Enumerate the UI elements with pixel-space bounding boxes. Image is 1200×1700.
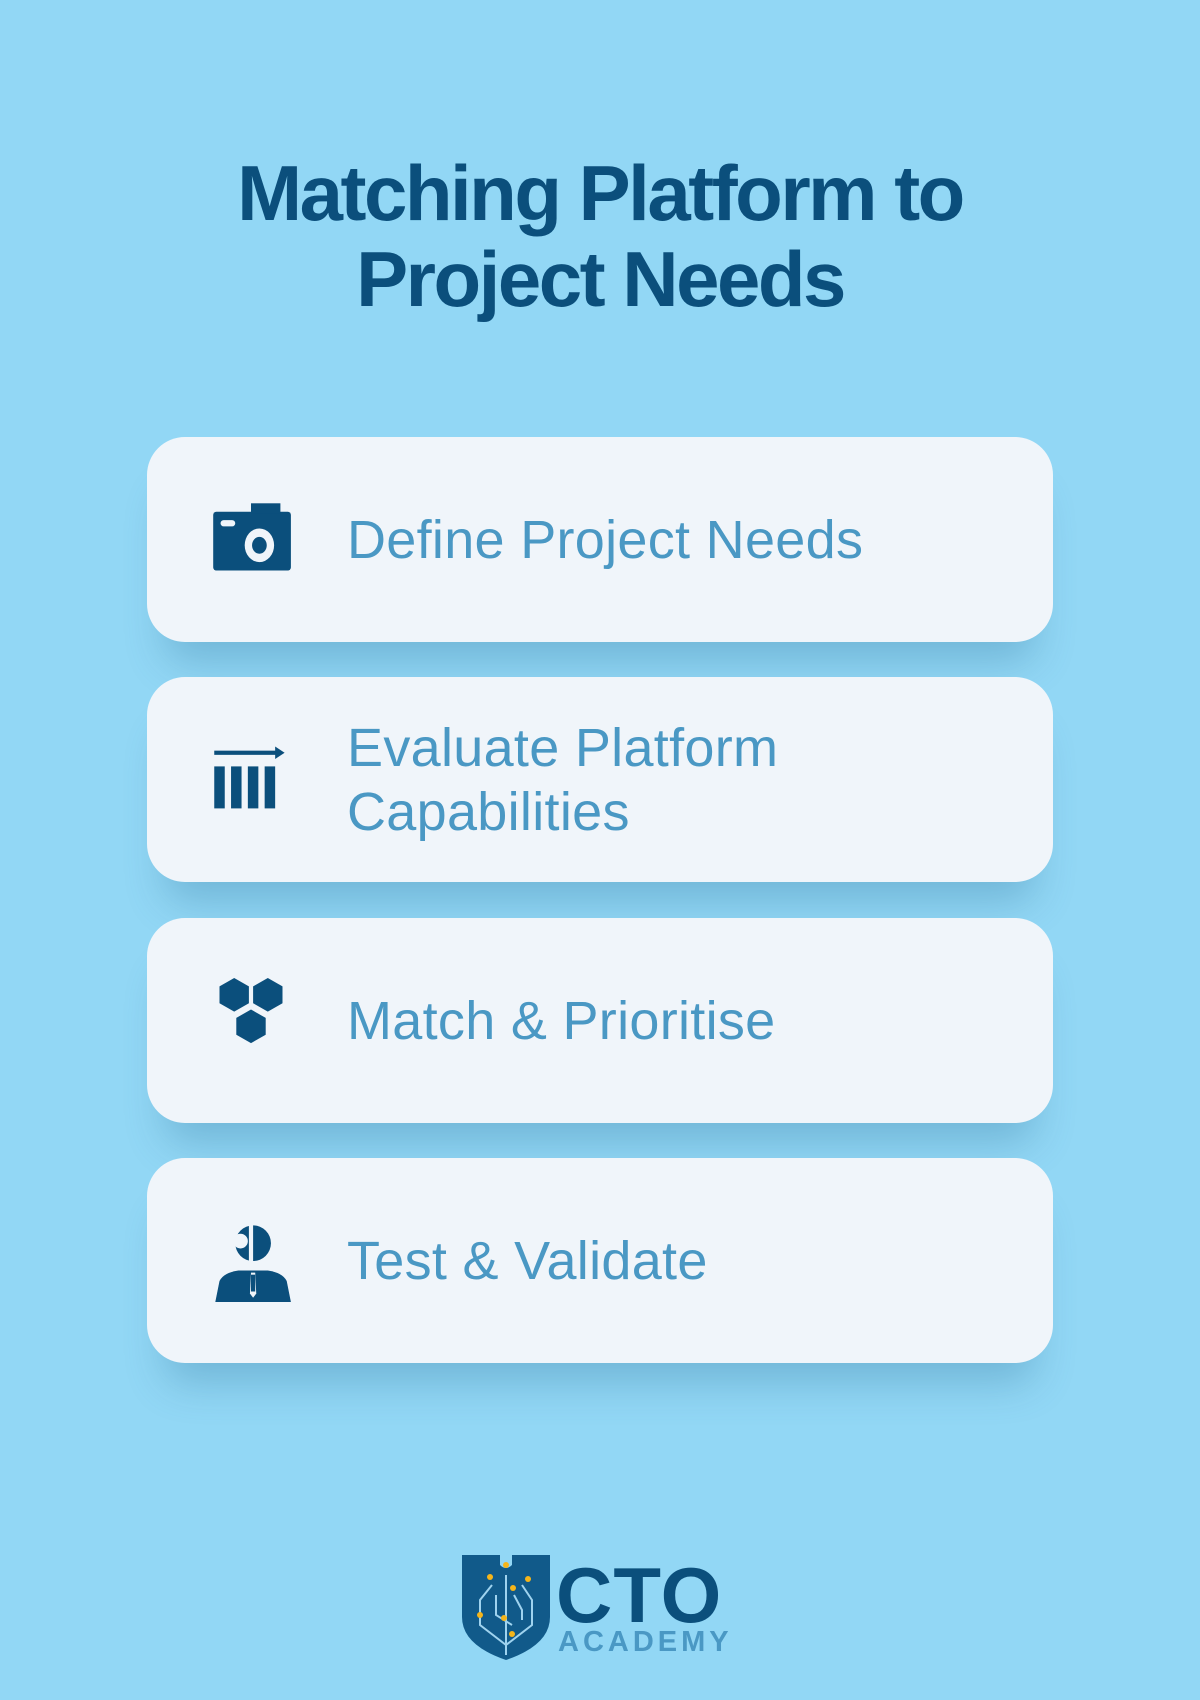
label: Define Project Needs	[347, 510, 863, 570]
logo: CTO Academy	[462, 1551, 733, 1660]
label: Match & Prioritise	[347, 990, 776, 1050]
title	[237, 149, 963, 323]
brand text: CTO	[556, 1551, 722, 1639]
icon: hexagons	[220, 978, 282, 1044]
title: Matching Platform to	[237, 149, 963, 237]
label	[347, 718, 778, 842]
card: evaluate platform capabilities	[147, 677, 1053, 882]
card: define project needs	[147, 437, 1053, 642]
title: Project Needs	[356, 235, 844, 323]
icon: shield	[462, 1555, 550, 1660]
icon: camera	[213, 503, 291, 570]
card: match & prioritise	[147, 918, 1053, 1123]
card: test & validate	[147, 1158, 1053, 1363]
label: Capabilities	[347, 782, 630, 842]
label: Test & Validate	[347, 1230, 708, 1290]
label: Evaluate Platform	[347, 718, 778, 778]
logo: CTO Academy: ACADEMY	[558, 1626, 733, 1658]
icon: person with gear	[215, 1225, 291, 1302]
icon: bars with arrow	[214, 746, 284, 808]
